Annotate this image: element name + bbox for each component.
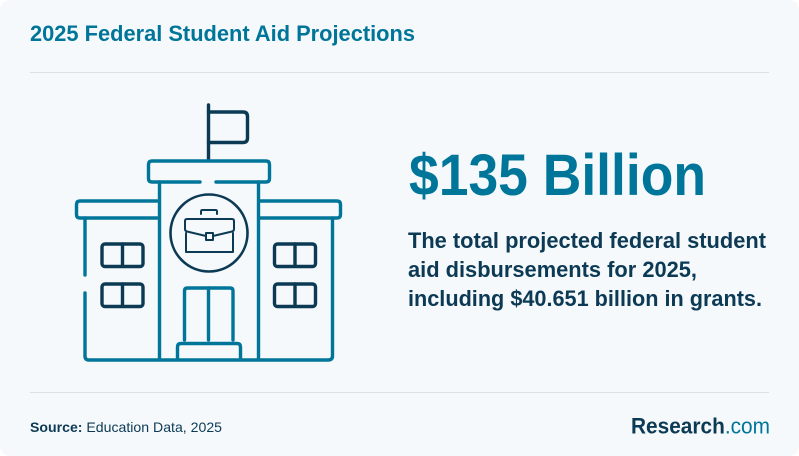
icon: building outline (76, 161, 340, 360)
description text: including $40.651 billion in grants. (408, 286, 762, 311)
description text: aid disbursements for 2025, (408, 257, 697, 282)
title: 2025 Federal Student Aid Projections (30, 21, 415, 46)
logo: Research.com: Research.com (631, 414, 770, 438)
icon: school building with flag and briefcase (76, 105, 340, 360)
description text: The total projected federal student (408, 228, 766, 253)
big number: $135 Billion (409, 143, 706, 208)
icon: flag (208, 105, 248, 160)
description text (408, 228, 766, 311)
icon: windows left (102, 244, 143, 306)
icon: windows right (274, 244, 316, 306)
source note: Source: Education Data, 2025 (30, 419, 222, 435)
icon: briefcase emblem (170, 194, 248, 272)
